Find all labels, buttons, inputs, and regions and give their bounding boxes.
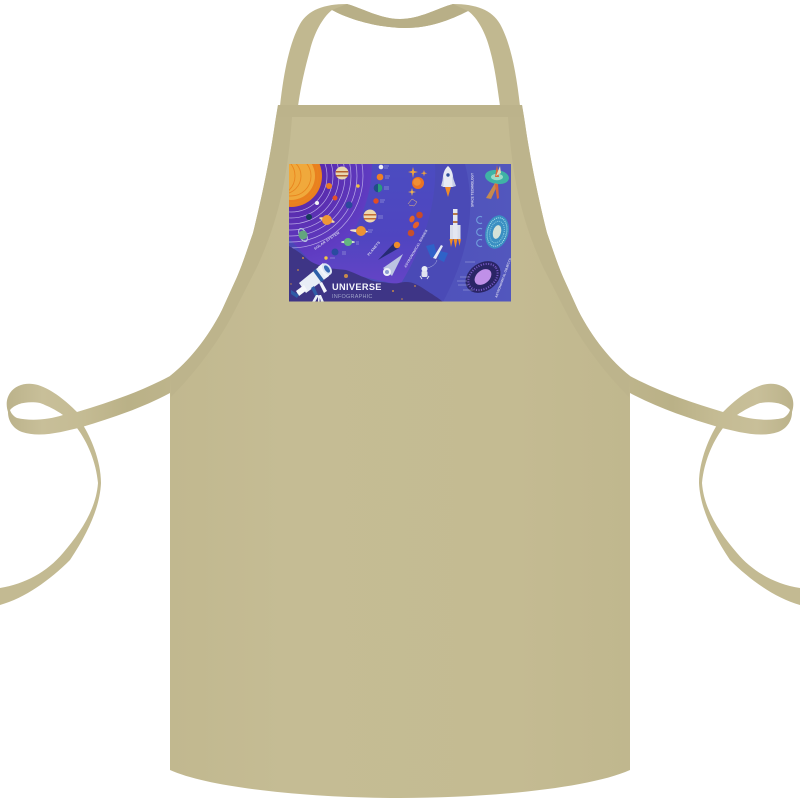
section label: solar system: SOLAR SYSTEM	[313, 231, 340, 251]
section label: space technology: SPACE TECHNOLOGY	[470, 172, 474, 207]
title: universe: UNIVERSE	[332, 282, 382, 292]
subtitle: infographic: INFOGRAPHIC	[332, 294, 373, 300]
panel background	[289, 164, 511, 302]
left waist tie	[0, 376, 170, 605]
icon: sun	[289, 164, 322, 207]
left bib hem	[170, 117, 292, 397]
bib top band	[276, 105, 524, 117]
icon: stars and star	[408, 167, 427, 196]
icon: constellation	[408, 199, 417, 206]
planets column	[324, 165, 383, 260]
section label: planets: PLANETS	[367, 240, 381, 257]
icon: orange comet	[378, 242, 400, 260]
right waist tie	[630, 376, 800, 605]
solar system planets	[297, 166, 360, 243]
printed universe infographic panel	[289, 164, 511, 302]
icon: wormhole	[484, 165, 510, 199]
icon: rocket one	[441, 166, 456, 197]
section label: astronomical bodies: ASTRONOMICAL BODIES	[403, 228, 429, 268]
icon: purple galaxy	[466, 261, 500, 293]
neck strap	[280, 4, 520, 106]
icon: spiral galaxy	[485, 215, 509, 249]
icon: satellite	[426, 244, 448, 262]
icon: white comet	[383, 254, 403, 276]
icon: asteroids	[408, 212, 423, 236]
planets band	[326, 176, 435, 284]
icon: small rings	[477, 217, 482, 246]
dark hill region	[289, 246, 443, 302]
planet labels	[330, 166, 390, 258]
orbit rings	[289, 164, 364, 248]
right bib hem	[508, 117, 630, 397]
apron body	[170, 105, 630, 798]
section label: astronomical objects: ASTRONOMICAL OBJECTS	[494, 258, 512, 298]
astronomical bodies band	[435, 164, 470, 300]
icon: rocket two	[450, 209, 461, 248]
galaxy labels	[457, 262, 475, 290]
hill stars	[290, 257, 416, 300]
icon: astronaut	[420, 260, 437, 279]
icon: telescope	[291, 261, 334, 302]
solar system band	[289, 164, 372, 270]
